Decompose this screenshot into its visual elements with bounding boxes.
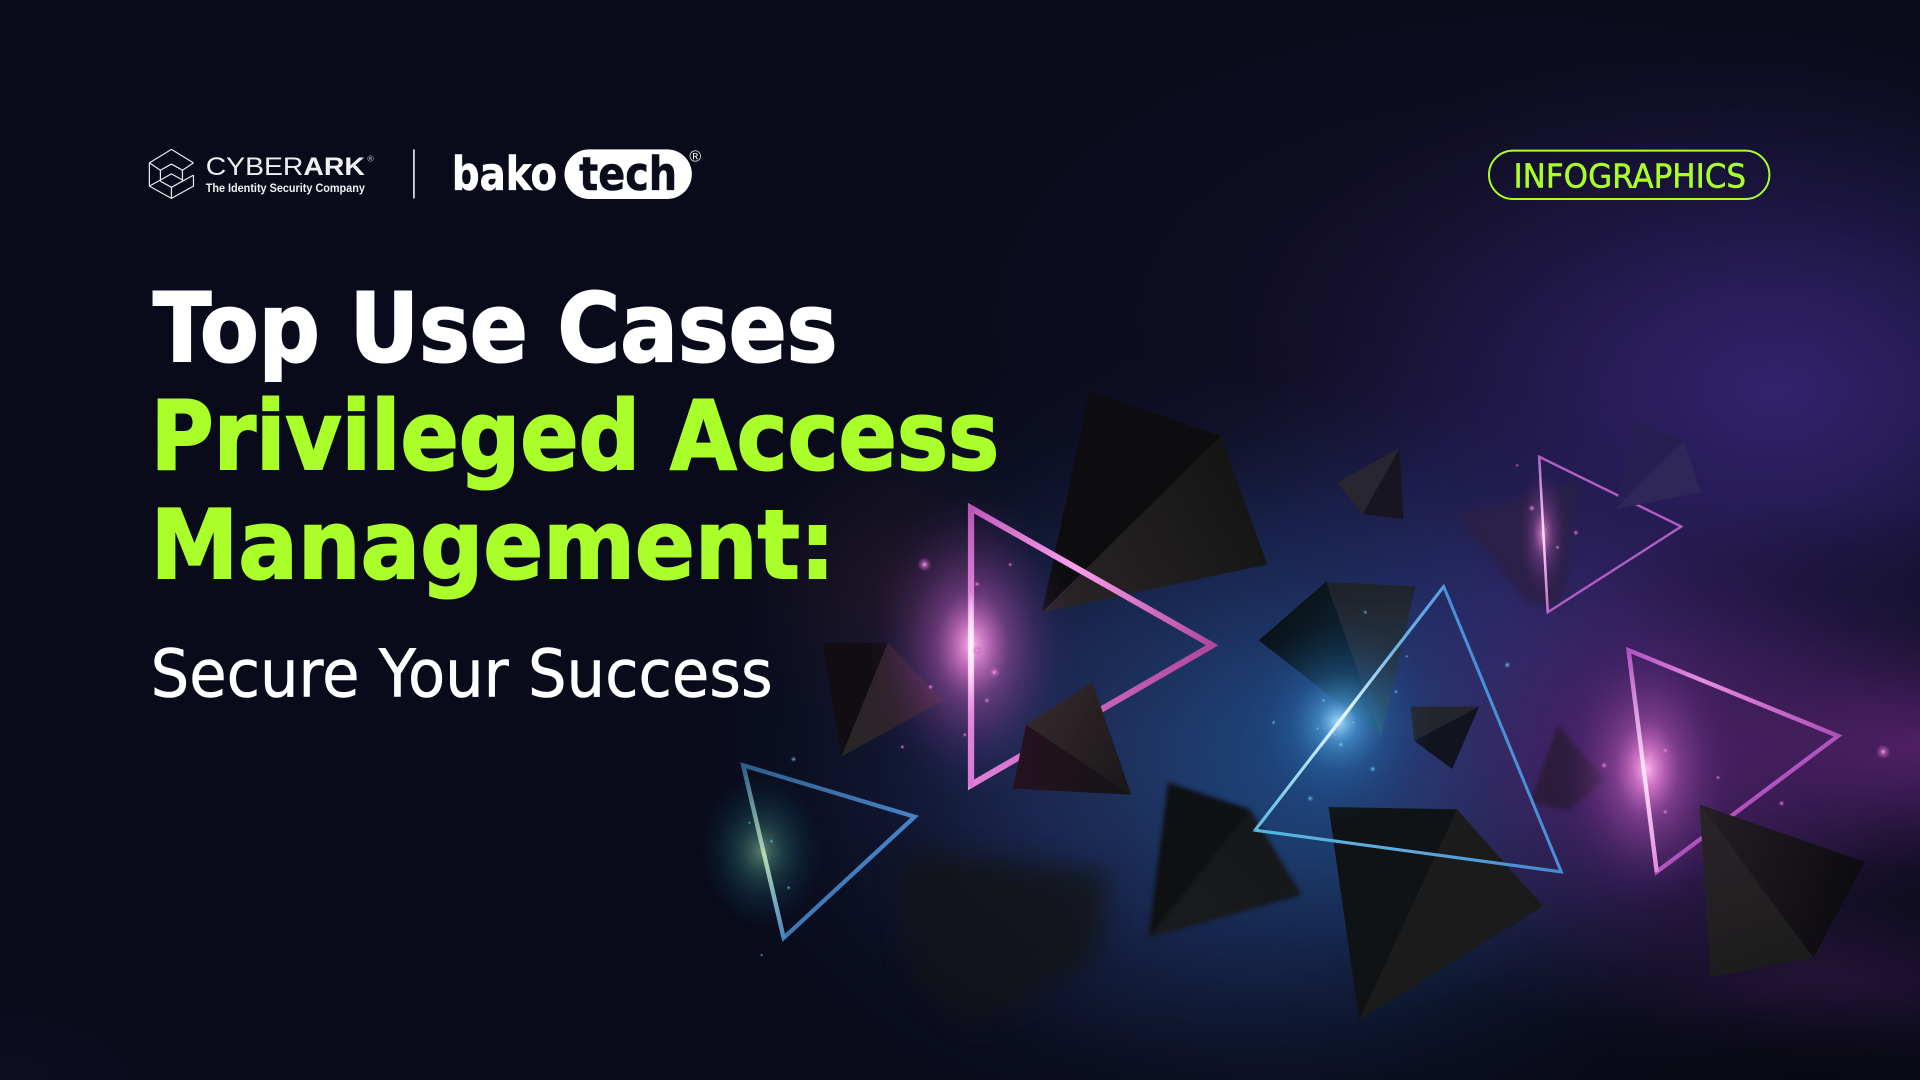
pyramid: small left: [823, 643, 943, 757]
title line 2: Privileged Access: [151, 380, 999, 492]
triangle: green-blue: [743, 765, 915, 938]
registered mark: ®: [689, 149, 701, 166]
title line 3: Management:: [151, 489, 835, 601]
pyramid: small centre: [1411, 707, 1479, 769]
subtitle: Secure Your Success: [151, 636, 773, 713]
pyramid: overlapping pink triangle: [1013, 682, 1131, 795]
wordmark: bako: bako: [452, 147, 557, 201]
sparkles: [748, 463, 1891, 957]
pyramid: lower right: [1700, 804, 1865, 977]
glow: pink triangle: [868, 492, 1076, 798]
pyramid: overlapping small purple triangle: [1615, 422, 1701, 509]
glow: small purple triangle: [1516, 463, 1570, 605]
triangle: right purple: [1629, 650, 1838, 872]
pill: tech: [564, 149, 692, 199]
logo divider: [413, 149, 415, 198]
glow: right purple triangle: [1555, 628, 1739, 910]
pyramid: lower centre: [1329, 807, 1543, 1020]
badge: infographics: INFOGRAPHICS: [1513, 156, 1746, 195]
logo: bakotech: [452, 147, 701, 201]
glow: green triangle: [700, 775, 823, 927]
pyramid: top centre: [1042, 392, 1267, 612]
tagline: The Identity Security Company: [206, 182, 365, 195]
icon: CyberArk cube: [149, 149, 193, 198]
triangle: small purple: [1539, 457, 1681, 612]
pyramid: small upper: [1337, 448, 1403, 519]
triangle: blue: [1255, 587, 1561, 872]
blurred pyramids behind the triangles: [900, 481, 1605, 1026]
logo: CyberArk: [149, 149, 374, 198]
glow: blue triangle: [1243, 622, 1434, 823]
title line 1: Top Use Cases: [153, 272, 838, 384]
registered mark: ®: [367, 154, 374, 164]
triangle: large pink: [967, 506, 1212, 787]
wordmark: tech: tech: [579, 147, 677, 201]
wordmark: CYBERARK: CYBER ARK: [206, 153, 365, 181]
title: [151, 272, 999, 601]
pyramid: behind blue triangle: [1259, 582, 1416, 736]
